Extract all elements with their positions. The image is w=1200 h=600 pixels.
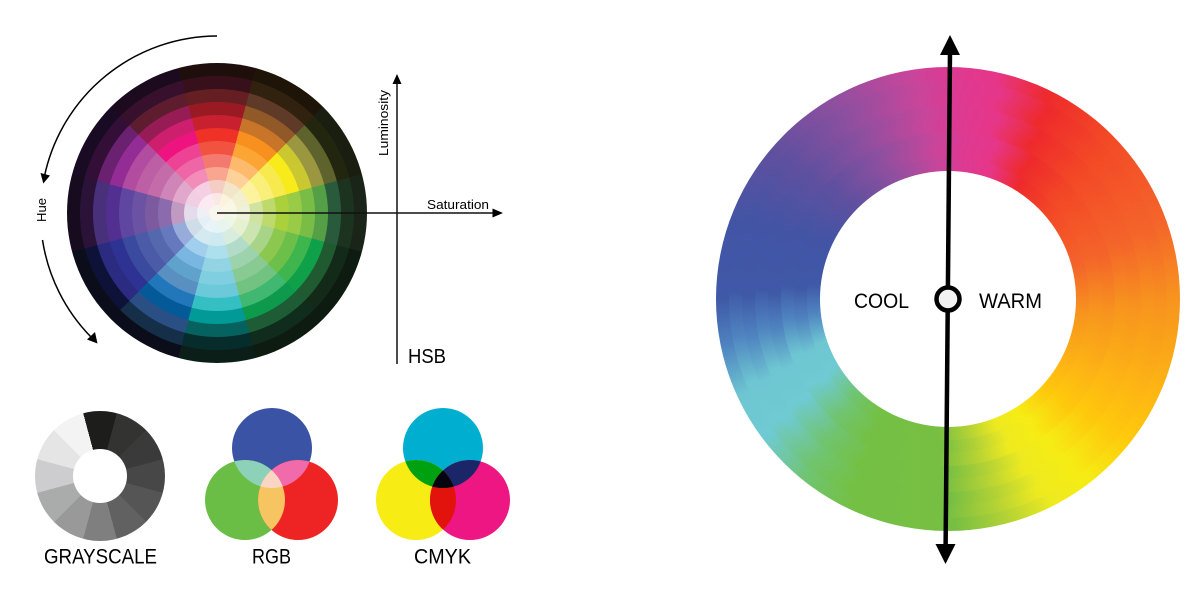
double arrow: warm cool divider (936, 35, 960, 564)
label: HSB: HSB (408, 345, 446, 368)
label: CMYK: CMYK (414, 546, 471, 568)
warm and cool color ring (716, 67, 1180, 531)
HSB color wheel (67, 63, 367, 363)
RGB venn diagram (205, 408, 338, 540)
arrow: hue upper (40, 36, 217, 184)
grayscale wheel (35, 411, 165, 541)
label: RGB: RGB (252, 546, 291, 568)
label: GRAYSCALE: GRAYSCALE (44, 546, 157, 568)
axis: luminosity (392, 74, 402, 364)
arrow: hue lower (42, 240, 98, 344)
center node (936, 288, 960, 310)
axis: saturation (217, 208, 503, 218)
label: Saturation: Saturation (427, 198, 489, 212)
label: Luminosity: Luminosity (377, 89, 391, 156)
CMYK venn diagram (376, 408, 510, 540)
label: Hue: Hue (35, 198, 49, 222)
label: COOL: COOL (854, 290, 909, 313)
label: WARM: WARM (979, 290, 1042, 313)
